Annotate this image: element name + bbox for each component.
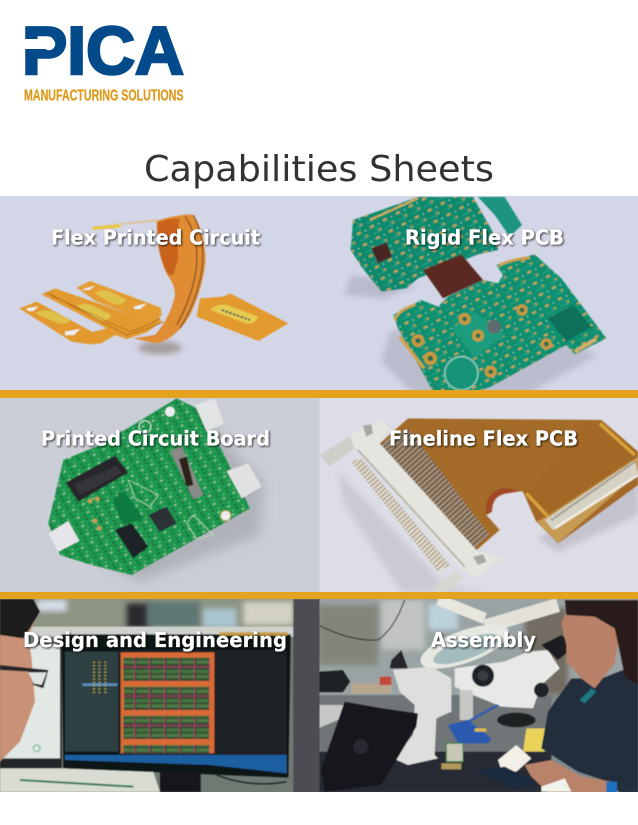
label: Design and Engineering — [23, 628, 287, 652]
label: Flex Printed Circuit — [51, 226, 260, 250]
panel: Assembly — [318, 599, 638, 792]
image: flex circuit — [19, 214, 288, 354]
bar: gold divider 2 — [0, 592, 638, 599]
panel: Design and Engineering — [0, 598, 320, 792]
image: technician at microscope — [318, 599, 638, 792]
image: green circuit board — [48, 398, 263, 582]
logo: PICA Manufacturing Solutions — [18, 13, 184, 104]
panel: Printed Circuit Board — [0, 398, 320, 592]
panel: Flex Printed Circuit — [0, 196, 320, 390]
label: Fineline Flex PCB — [389, 426, 578, 450]
image: fineline flex with connectors — [320, 418, 638, 595]
panel: Rigid Flex PCB — [320, 196, 638, 395]
image: engineer at monitor — [0, 598, 320, 792]
panel: Fineline Flex PCB — [320, 398, 638, 595]
label: Printed Circuit Board — [41, 426, 270, 450]
bar: gold divider 1 — [0, 390, 638, 398]
image: rigid flex board — [345, 197, 606, 395]
label: Assembly — [431, 628, 536, 652]
title: Capabilities Sheets — [144, 149, 494, 190]
logo wordmark: PICA — [22, 13, 184, 89]
logo tagline: MANUFACTURING SOLUTIONS — [24, 88, 184, 104]
label: Rigid Flex PCB — [405, 226, 564, 250]
